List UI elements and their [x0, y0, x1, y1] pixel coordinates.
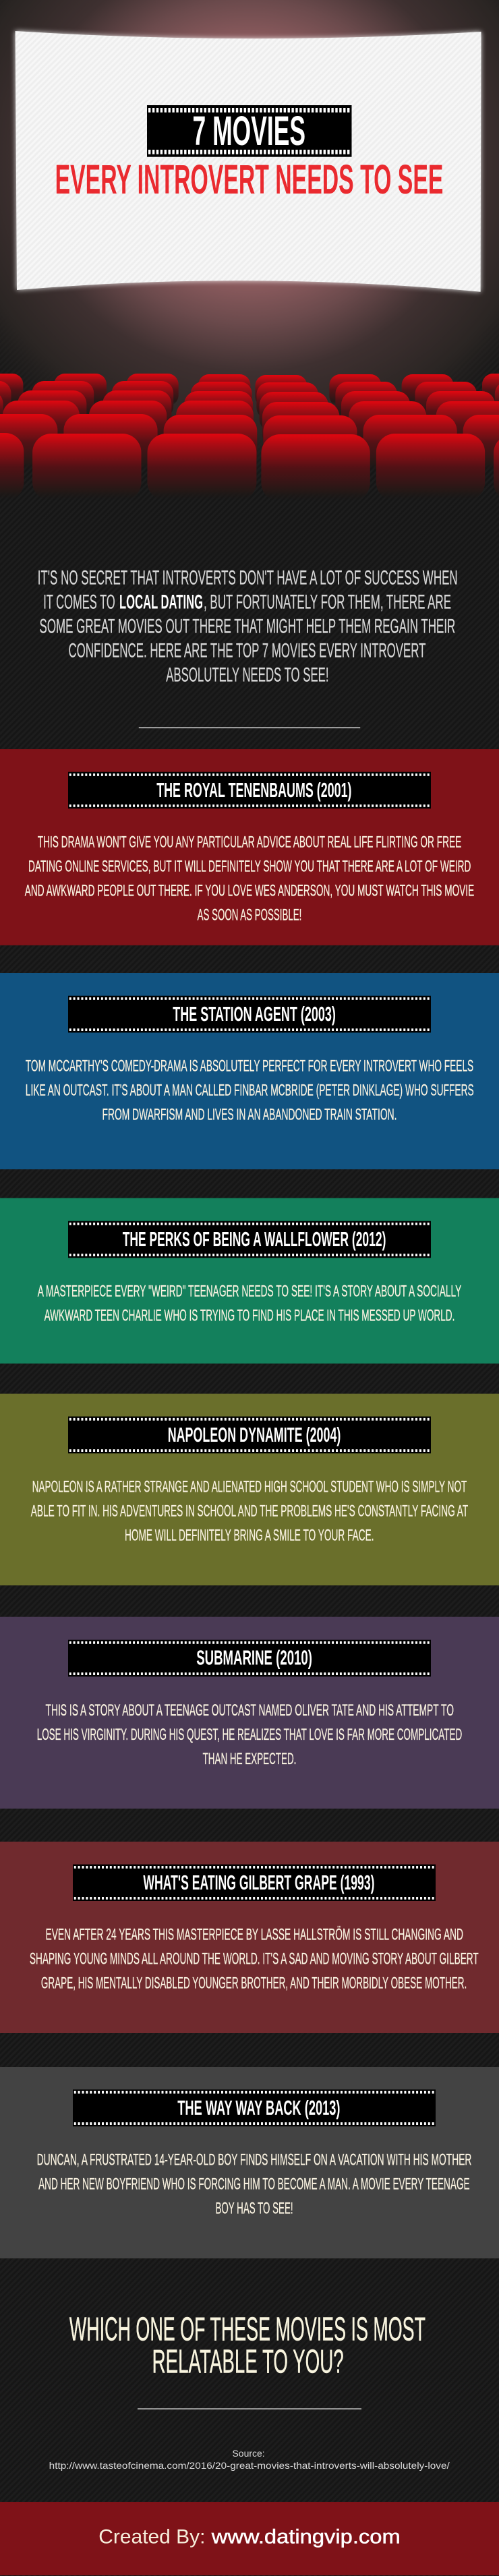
description — [26, 1057, 474, 1124]
movie title filmstrip — [68, 1221, 431, 1258]
movie title filmstrip: THE STATION AGENT (2003) — [173, 1003, 336, 1026]
intro paragraph: ABSOLUTELY NEEDS TO SEE! — [166, 664, 329, 686]
movie title filmstrip — [73, 1865, 436, 1901]
source — [49, 2448, 450, 2471]
description: BOY HAS TO SEE! — [216, 2200, 293, 2218]
movie title filmstrip: THE ROYAL TENENBAUMS (2001) — [156, 779, 351, 802]
source: http://www.tasteofcinema.com/2016/20-great-movies-that-introverts-will-absolutely-love/ — [49, 2460, 450, 2471]
panel: Submarine — [0, 1617, 499, 1809]
movie title filmstrip: NAPOLEON DYNAMITE (2004) — [168, 1424, 341, 1446]
panel: What's Eating Gilbert Grape — [0, 1842, 499, 2033]
footer — [0, 2502, 499, 2575]
movie title filmstrip — [73, 2089, 436, 2126]
closing question — [69, 2311, 425, 2380]
description — [25, 833, 474, 925]
intro paragraph: LOCAL DATING — [119, 591, 203, 614]
footer: www.datingvip.com — [211, 2526, 401, 2548]
movie title filmstrip — [68, 1416, 431, 1453]
hero: cinema scene — [0, 0, 499, 513]
panel: The Way Way Back — [0, 2067, 499, 2258]
description — [30, 1926, 479, 1993]
description — [31, 1478, 468, 1545]
movie title filmstrip — [68, 996, 431, 1032]
description — [37, 1701, 462, 1768]
intro paragraph: IT COMES TO — [43, 591, 115, 614]
projector light glow — [0, 0, 499, 513]
movie title filmstrip — [68, 1640, 431, 1676]
closing question: RELATABLE TO YOU? — [152, 2343, 344, 2380]
panel: The Station Agent — [0, 973, 499, 1169]
title filmstrip: 7 MOVIES — [193, 108, 305, 154]
intro paragraph — [38, 567, 458, 686]
cinema screen — [16, 31, 481, 292]
source: Source: — [232, 2448, 265, 2459]
title filmstrip — [147, 105, 352, 157]
movie title filmstrip: SUBMARINE (2010) — [196, 1647, 312, 1670]
movie title filmstrip — [68, 772, 431, 809]
panel: Napoleon Dynamite — [0, 1394, 499, 1585]
movie title filmstrip: THE WAY WAY BACK (2013) — [177, 2097, 340, 2119]
description — [38, 1283, 461, 1325]
footer: Created By: — [98, 2526, 205, 2548]
description: AS SOON AS POSSIBLE! — [198, 906, 301, 925]
description: THAN HE EXPECTED. — [203, 1750, 296, 1768]
panel: The Perks of Being a Wallflower — [0, 1198, 499, 1364]
panel: The Royal Tenenbaums — [0, 749, 499, 945]
cinema seats — [0, 374, 499, 502]
description — [37, 2151, 471, 2218]
